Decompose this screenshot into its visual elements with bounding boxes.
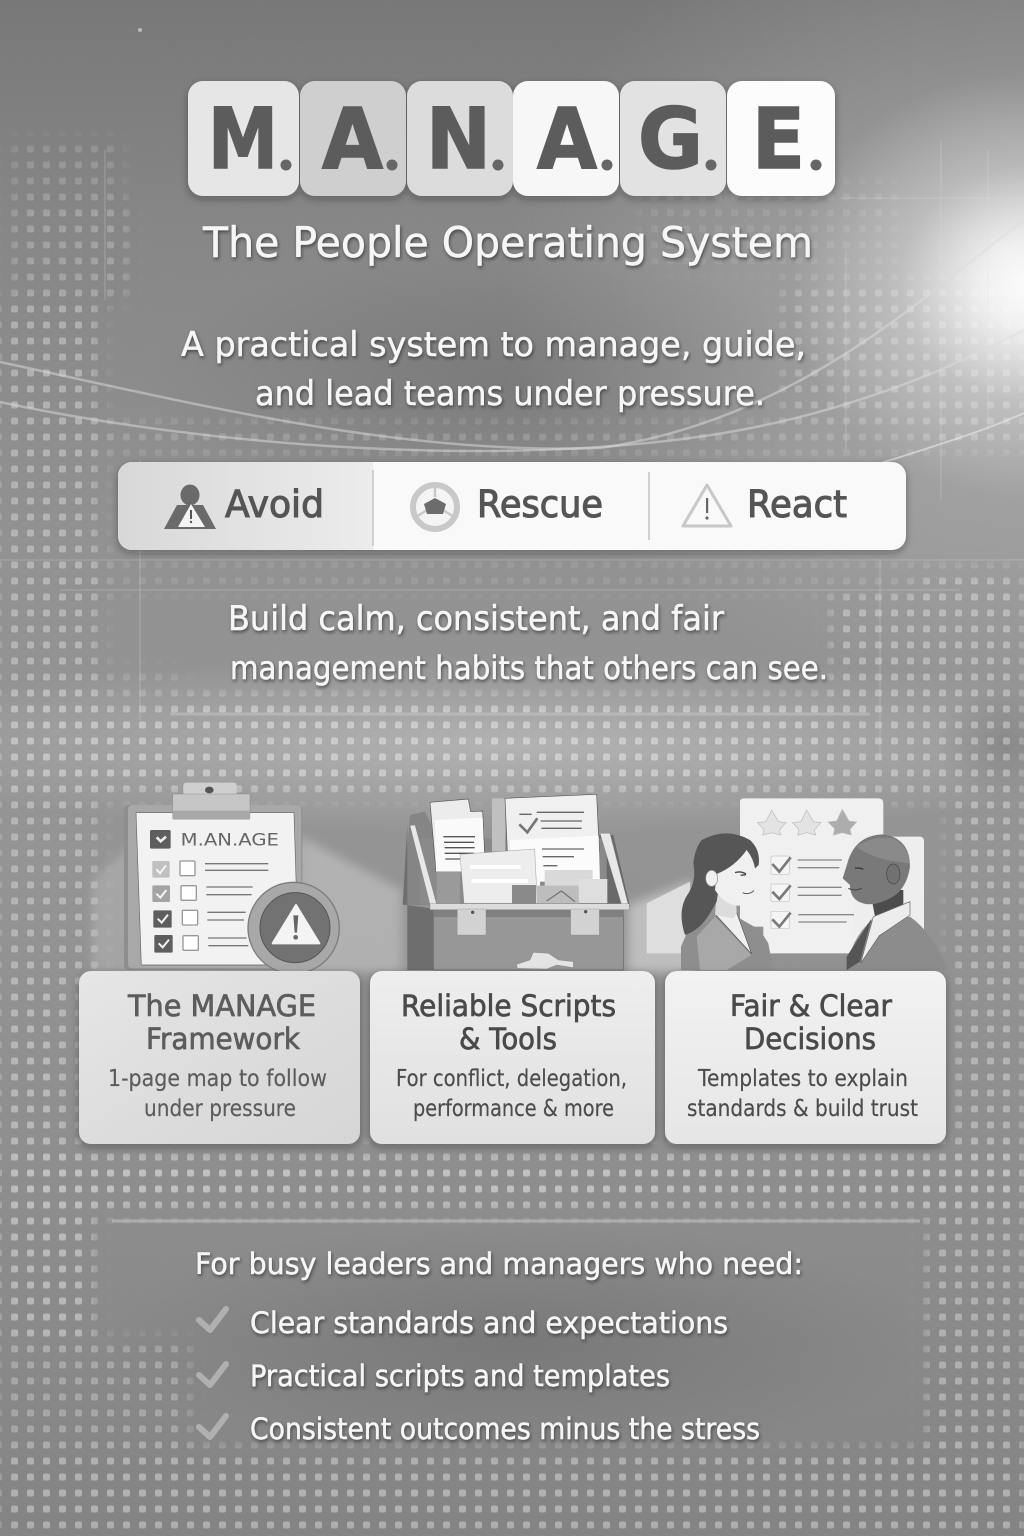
title: M.A.N.A.G.E. letter tiles [188, 81, 835, 196]
item 2: Practical scripts and templates [250, 1359, 670, 1393]
react label: React [747, 483, 847, 526]
value statement: Build calm, consistent, and fair [228, 599, 724, 639]
card description [108, 1066, 327, 1122]
item 3: Consistent outcomes minus the stress [250, 1412, 760, 1446]
card description: For conflict, delegation, [396, 1066, 627, 1092]
card description: standards & build trust [687, 1096, 918, 1122]
backdrop shapes behind illustrations [92, 835, 692, 972]
icon: react warning triangle [683, 485, 731, 526]
icon: rescue ring [413, 485, 457, 529]
rescue label: Rescue [477, 483, 603, 526]
intro text: and lead teams under pressure. [255, 374, 765, 414]
value statement [228, 599, 828, 687]
card description: under pressure [144, 1096, 296, 1122]
item 1: Clear standards and expectations [250, 1306, 728, 1340]
checklist [199, 1306, 760, 1446]
man [843, 834, 948, 970]
value statement: management habits that others can see. [230, 649, 828, 687]
panel: reliable scripts and tools card [370, 971, 655, 1144]
woman [681, 833, 773, 970]
card heading: Framework [146, 1022, 300, 1056]
title: M.A.N.A.G.E. letter tiles: A [537, 90, 597, 188]
card description: Templates to explain [697, 1066, 908, 1092]
panel: the MANAGE framework card [79, 971, 360, 1144]
card description [687, 1066, 918, 1122]
audience heading: For busy leaders and managers who need: [195, 1247, 803, 1281]
card heading [127, 989, 316, 1056]
panel: avoid rescue react bar [118, 462, 906, 550]
card heading: Decisions [744, 1022, 876, 1056]
illustration: clipboard with warning badge [124, 783, 339, 974]
card description: 1-page map to follow [108, 1066, 327, 1092]
card heading [401, 989, 616, 1056]
card heading: The MANAGE [127, 989, 316, 1023]
card description: performance & more [413, 1096, 614, 1122]
illustration: two people with star rating checklist [647, 798, 948, 970]
card description [396, 1066, 627, 1122]
title: M.A.N.A.G.E. letter tiles: N [426, 90, 491, 188]
avoid label: Avoid [225, 483, 324, 526]
intro text: A practical system to manage, guide, [181, 325, 806, 365]
card heading [730, 989, 892, 1056]
illustration: clipboard with warning badge: M.AN.AGE [181, 830, 279, 850]
card heading: Fair & Clear [730, 989, 892, 1023]
illustration: toolbox of scripts and documents [403, 794, 630, 970]
icon: avoid person with warning [164, 484, 216, 529]
title: M.A.N.A.G.E. letter tiles: M [208, 90, 278, 188]
card heading: Reliable Scripts [401, 989, 616, 1023]
panel: fair and clear decisions card [665, 971, 946, 1144]
title: M.A.N.A.G.E. letter tiles: A [322, 90, 383, 188]
intro text [181, 325, 806, 414]
title: M.A.N.A.G.E. letter tiles: E [752, 90, 805, 188]
title: M.A.N.A.G.E. letter tiles: G [638, 90, 703, 188]
subtitle: The People Operating System [202, 218, 813, 267]
card heading: & Tools [459, 1022, 557, 1056]
